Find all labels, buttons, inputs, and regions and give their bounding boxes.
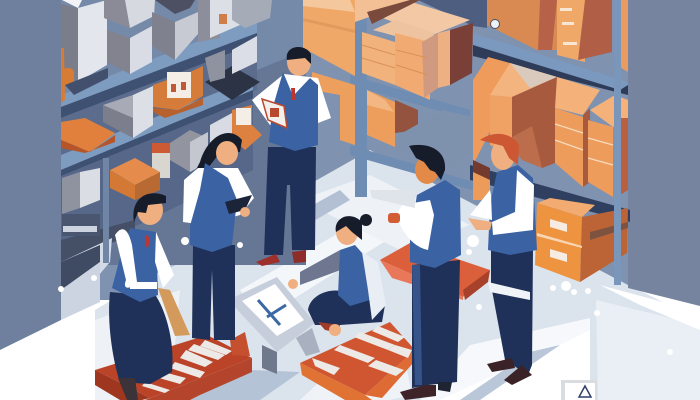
vest [269, 72, 318, 151]
shirt [183, 168, 254, 225]
hand [468, 218, 492, 230]
shoes [487, 358, 515, 372]
pants [491, 250, 533, 375]
left shelving [61, 0, 306, 320]
tablet [225, 195, 252, 214]
arm [115, 229, 174, 288]
warehouse floor [61, 150, 700, 400]
shoes [256, 254, 280, 266]
shirt [252, 74, 331, 130]
logo badge [561, 380, 597, 400]
left red pallet with cards [95, 332, 252, 400]
vest [338, 245, 370, 306]
head [137, 195, 163, 225]
pants [412, 260, 460, 388]
legs [109, 292, 173, 384]
right wall [628, 0, 700, 306]
pants [192, 245, 235, 340]
head [287, 48, 311, 76]
shelf boxes: left column [61, 0, 272, 103]
right upright [614, 0, 621, 285]
boxes: top right stacks [487, 0, 628, 72]
cardboard sheet [158, 288, 190, 336]
vest [410, 180, 461, 268]
red pallet behind [380, 243, 490, 300]
vest [112, 228, 158, 302]
dust circles [58, 235, 673, 355]
shoes [400, 385, 436, 400]
hair [133, 193, 166, 222]
sleeve [300, 250, 346, 285]
person: man facing away [370, 145, 461, 400]
hair [409, 145, 445, 180]
head [415, 156, 439, 184]
right shelving [350, 0, 630, 222]
pants [264, 147, 316, 255]
head [216, 141, 238, 165]
shirt [362, 252, 386, 320]
hair [480, 134, 519, 165]
person: crouching woman [288, 214, 386, 336]
shelf boxes: second tier [61, 36, 262, 236]
front red pallet with cards [300, 322, 415, 400]
boxes: lower right stacks [473, 57, 628, 282]
person: man with book [252, 47, 331, 266]
left wall [0, 0, 61, 350]
sleeve [396, 200, 434, 250]
vest [190, 163, 237, 252]
display stand [228, 277, 320, 374]
head [491, 140, 515, 170]
shirt [470, 170, 534, 235]
shoe [118, 378, 138, 400]
book [262, 99, 287, 128]
hair [287, 47, 311, 64]
white band on floor [488, 282, 530, 300]
bun [360, 214, 372, 226]
person: woman with tablet [183, 133, 254, 340]
boxes: top center stacks [303, 0, 473, 147]
hair [183, 133, 242, 195]
hair [336, 216, 362, 240]
person: red-haired man [468, 134, 537, 385]
vest [488, 165, 537, 255]
person: seated man left [109, 193, 190, 400]
back wall [61, 0, 628, 300]
legs [308, 291, 385, 325]
paper [370, 190, 415, 208]
head [336, 219, 358, 245]
grey pallet [395, 110, 473, 168]
